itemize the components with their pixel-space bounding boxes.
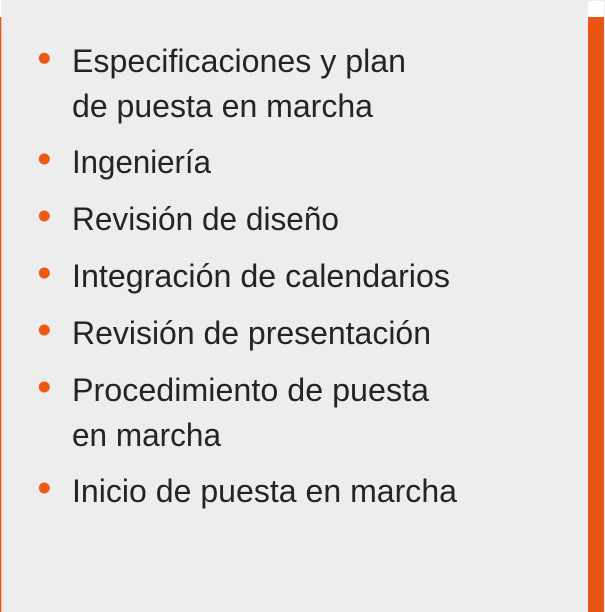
item: especificaciones: de puesta en marcha [72,88,374,124]
item: integración de calendarios: Integración de calendarios [72,258,450,294]
top-left white notch [0,0,1,17]
item: ingeniería: Ingeniería [72,144,212,180]
bullet list [39,43,458,509]
item: procedimiento de puesta en marcha [39,372,430,453]
item: revisión de diseño: Revisión de diseño [72,201,339,237]
item: especificaciones [39,43,406,124]
right orange bar [588,17,604,612]
left orange stripe [0,17,1,612]
item: procedimiento de puesta en marcha: en marcha [72,417,222,453]
item: revisión de presentación: Revisión de presentación [72,315,431,351]
item: procedimiento de puesta en marcha: Procedimiento de puesta [72,372,430,408]
top-right white notch [588,1,604,17]
item: inicio de puesta en marcha: Inicio de puesta en marcha [72,473,458,509]
item: especificaciones: Especificaciones y plan [72,43,406,79]
